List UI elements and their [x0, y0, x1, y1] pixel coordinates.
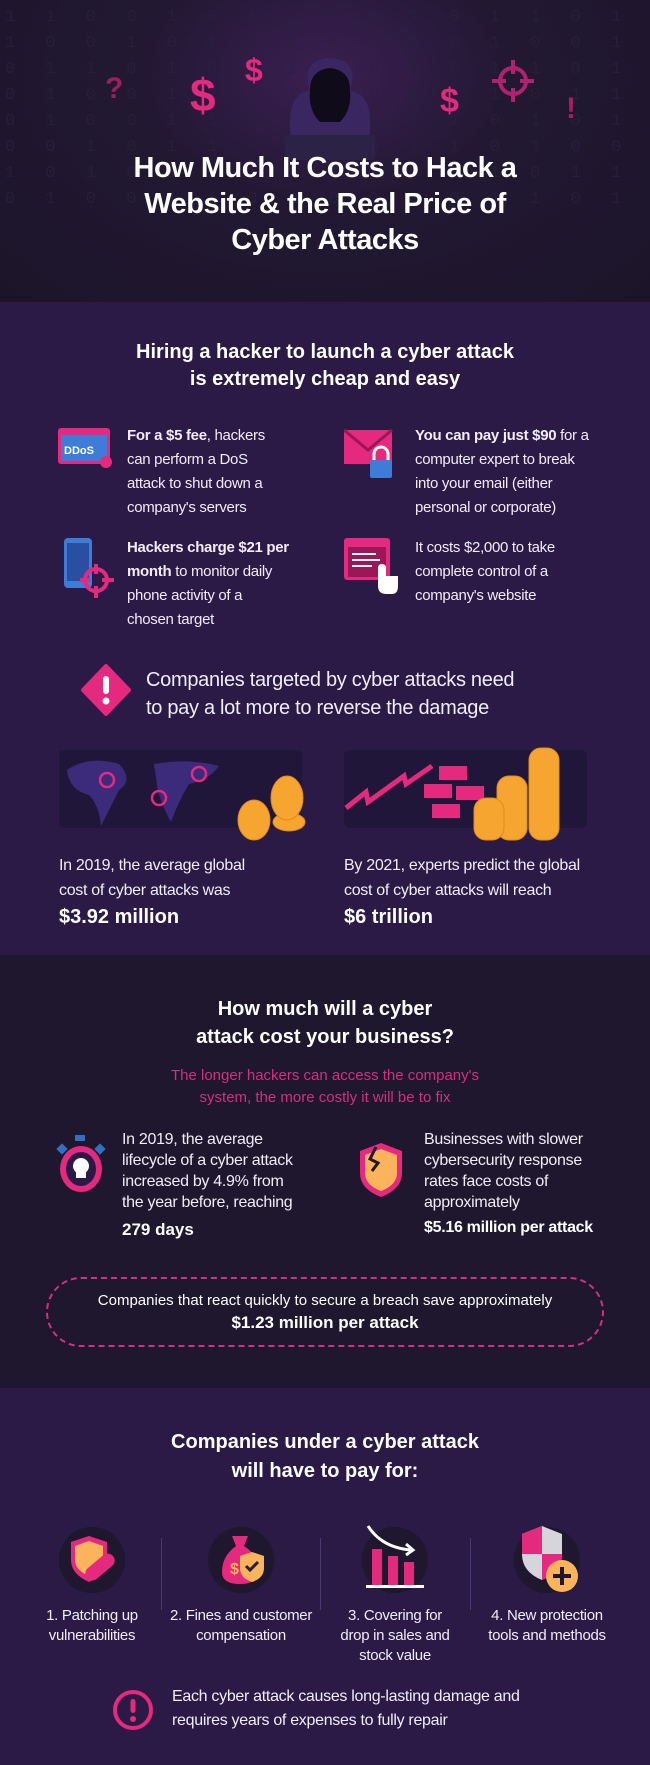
item: DDoS: company's servers — [127, 499, 246, 516]
icon: envelope lock — [344, 429, 393, 478]
section: hiring a hacker — [0, 302, 650, 955]
item 3: sales drop: stock value — [359, 1647, 431, 1664]
item: email: computer expert to break — [415, 451, 575, 468]
section: companies will pay for — [0, 1388, 650, 1765]
item 2: fines — [170, 1527, 312, 1644]
icon: falling bar chart — [362, 1525, 428, 1593]
subtitle: The longer hackers can access the company's — [171, 1067, 479, 1084]
title: Website & the Real Price of — [144, 188, 506, 220]
heading: Companies under a cyber attack — [171, 1431, 479, 1453]
icon: browser hand — [344, 538, 398, 594]
callout: long-lasting damage — [113, 1688, 520, 1730]
item: phone: phone activity of a — [127, 587, 242, 604]
item: slower response — [360, 1131, 594, 1236]
header section: ! — [566, 92, 576, 125]
header section: $ — [190, 69, 216, 121]
icon: ddos window: DDoS — [64, 445, 94, 457]
icon: pink symbols: ? — [105, 72, 123, 105]
header section: $ — [440, 82, 459, 120]
header section — [0, 0, 650, 302]
item 1: patching: vulnerabilities — [49, 1627, 135, 1644]
heading: is extremely cheap and easy — [190, 368, 460, 390]
heading: attack cost your business? — [196, 1026, 454, 1048]
icon: warning diamond — [81, 664, 131, 716]
chart illustration — [344, 748, 587, 840]
item: DDoS: attack to shut down a — [127, 475, 262, 492]
item: slower response: Businesses with slower — [424, 1131, 583, 1148]
item: slower response: rates face costs of — [424, 1173, 548, 1190]
item: website: complete control of a — [415, 563, 548, 580]
item: website: It costs $2,000 to take — [415, 539, 555, 556]
section: business cost — [0, 955, 650, 1388]
callout: reverse the damage: to pay a lot more to reverse the damage — [146, 697, 489, 719]
item: lifecycle: the year before, reaching — [122, 1194, 292, 1211]
header section: $ — [245, 52, 263, 88]
panel: 2021 prediction: By 2021, experts predict the global — [344, 857, 580, 874]
item: phone — [64, 538, 289, 628]
item: email — [344, 427, 589, 516]
item 2: fines: 2. Fines and customer — [170, 1607, 312, 1624]
item: phone: chosen target — [127, 611, 214, 628]
item: lifecycle — [56, 1131, 293, 1239]
item: email: You can pay just $90 for a — [415, 427, 589, 444]
title — [134, 152, 518, 256]
hacker figure — [290, 58, 374, 160]
item 4: protection tools: 4. New protection — [491, 1607, 603, 1624]
panel: 2019 cost: In 2019, the average global — [59, 857, 245, 874]
panel: 2019 cost: cost of cyber attacks was — [59, 882, 230, 899]
title: How Much It Costs to Hack a — [134, 152, 516, 184]
item 1: patching: 1. Patching up — [46, 1607, 138, 1624]
icon: money bag shield — [208, 1527, 274, 1593]
panel: 2019 cost: $3.92 million — [59, 906, 179, 928]
icon: money bag shield: $ — [230, 1561, 239, 1578]
subtitle: system, the more costly it will be to fix — [200, 1089, 450, 1106]
item: email: personal or corporate) — [415, 499, 556, 516]
icon: ddos window — [58, 428, 112, 468]
heading: will have to pay for: — [232, 1460, 418, 1482]
item 3: sales drop — [340, 1525, 450, 1664]
heading: Hiring a hacker to launch a cyber attack — [136, 341, 514, 363]
icon: stopwatch skull — [56, 1135, 106, 1192]
icon: broken shield — [360, 1143, 402, 1197]
callout: long-lasting damage: requires years of expenses to fully repair — [172, 1712, 448, 1729]
item: DDoS: For a $5 fee, hackers — [127, 427, 265, 444]
item: DDoS: can perform a DoS — [127, 451, 248, 468]
item: lifecycle: 279 days — [122, 1220, 194, 1239]
icon: exclamation circle — [113, 1690, 153, 1730]
heading: How much will a cyber — [218, 998, 432, 1020]
panel: 2021 prediction — [344, 748, 587, 928]
item 1: patching — [46, 1527, 138, 1644]
item: email: into your email (either — [415, 475, 552, 492]
icon: shield plus — [514, 1526, 580, 1593]
item 2: fines: compensation — [196, 1627, 286, 1644]
callout: long-lasting damage: Each cyber attack causes long-lasting damage and — [172, 1688, 520, 1705]
heading — [171, 1431, 479, 1482]
item: DDoS — [58, 427, 265, 516]
item 4: protection tools — [488, 1526, 606, 1644]
callout: reverse the damage: Companies targeted by cyber attacks need — [146, 669, 514, 691]
item: phone: Hackers charge $21 per — [127, 539, 289, 556]
icon: phone crosshair — [64, 538, 114, 598]
item: slower response: cybersecurity response — [424, 1152, 582, 1169]
icon: crosshair — [492, 60, 534, 102]
panel: 2019 cost — [59, 750, 306, 928]
panel: 2021 prediction: cost of cyber attacks will reach — [344, 882, 551, 899]
heading — [136, 341, 514, 390]
heading — [196, 998, 454, 1048]
icon: shield bandage — [59, 1527, 125, 1593]
item: lifecycle: increased by 4.9% from — [122, 1173, 283, 1190]
callout: dashed pill — [46, 1277, 604, 1347]
callout: reverse the damage — [81, 664, 514, 719]
callout: dashed pill: Companies that react quickly to secure a breach save approximately — [98, 1292, 552, 1309]
title: Cyber Attacks — [231, 224, 419, 256]
item: lifecycle: In 2019, the average — [122, 1131, 263, 1148]
item 4: protection tools: tools and methods — [488, 1627, 606, 1644]
item: website: company's website — [415, 587, 536, 604]
item: slower response: $5.16 million per attack — [424, 1219, 593, 1236]
item: website — [344, 538, 555, 604]
item: slower response: approximately — [424, 1194, 520, 1211]
callout: dashed pill: $1.23 million per attack — [231, 1313, 419, 1332]
item 3: sales drop: drop in sales and — [340, 1627, 450, 1644]
panel: 2021 prediction: $6 trillion — [344, 906, 433, 928]
item: phone: month to monitor daily — [127, 563, 272, 580]
binary background: 1 1 0 0 1 0 1 1 0 0 1 0 1 1 0 1 1 0 0 1 0 1 1 0 0 1 1 0 1 0 0 1 0 1 1 0 1 0 1 1 0 0 1 0 1 1 0 1 0 1 0 0 1 1 0 1 0 0 1 0 1 0 1 1 0 1 0 0 1 1 0 1 0 0 1 1 0 1 0 1 0 0 1 0 1 1 0 1 0 0 1 1 0 1 0 0 1 0 1 0 1 0 1 1 0 1 0 0 1 0 1 1 0 1 0 0 1 1 0 1 0 0 1 0 1 1 0 1 — [5, 8, 631, 209]
dividers — [161, 1538, 162, 1610]
item: lifecycle: lifecycle of a cyber attack — [122, 1152, 293, 1169]
subtitle — [171, 1067, 479, 1106]
map illustration — [59, 750, 306, 840]
item 3: sales drop: 3. Covering for — [348, 1607, 442, 1624]
